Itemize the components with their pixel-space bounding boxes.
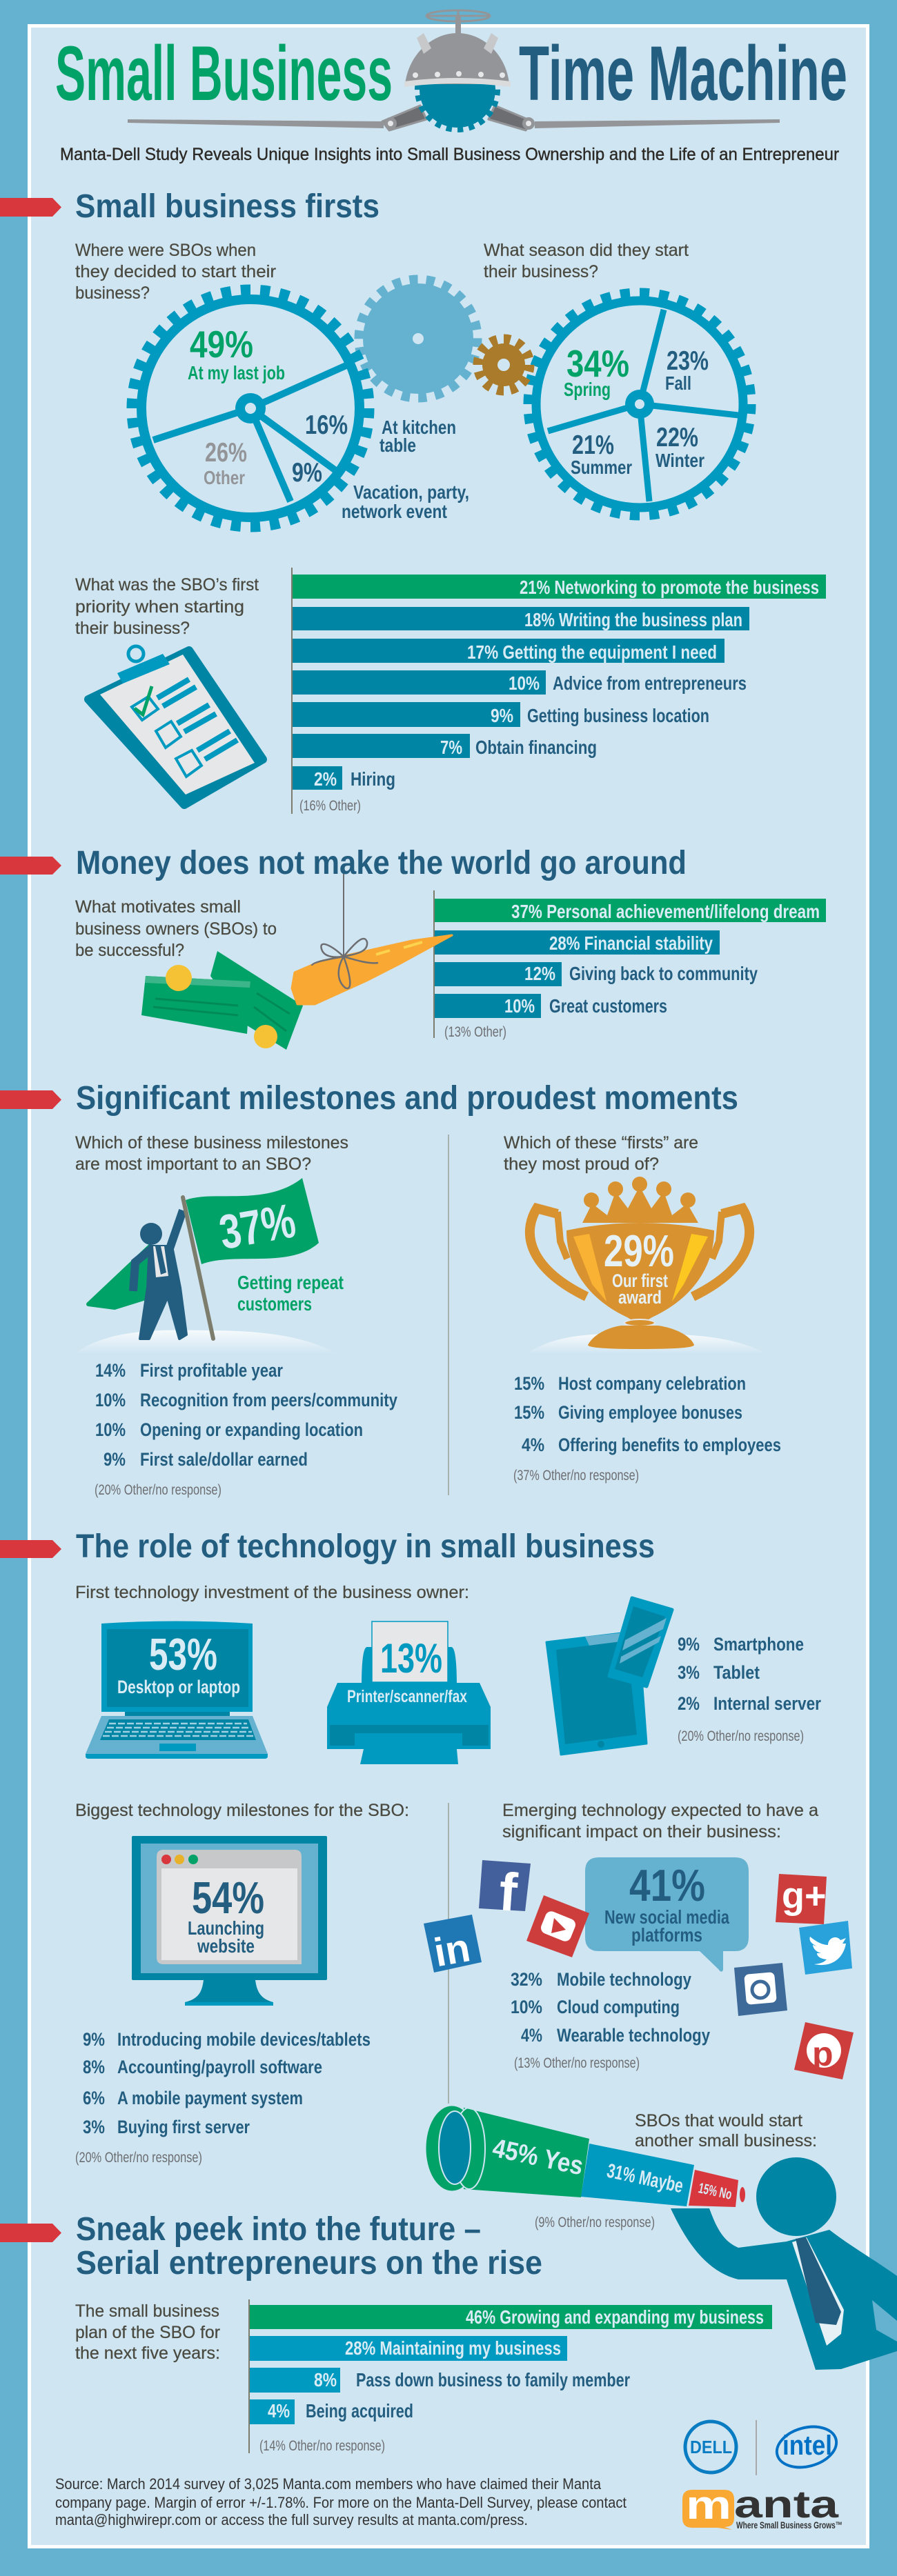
monitor value: 54%: 54% <box>192 1873 264 1923</box>
bar: 12% community <box>435 962 758 986</box>
list: other milestones: 10% <box>95 1390 126 1410</box>
note: 14% other: (14% Other/no response) <box>259 2438 385 2454</box>
bar: 18% writing plan <box>293 607 749 630</box>
list: other milestones: Recognition from peers/community <box>140 1390 397 1410</box>
callout: 41% new social media platforms: 41% <box>629 1860 705 1910</box>
callout: 41% new social media platforms: New social media <box>604 1906 729 1928</box>
question: Which of these business milestones <box>75 1133 348 1152</box>
icon: google plus: g+ <box>782 1875 827 1917</box>
label: 26% other: 26% <box>205 438 247 468</box>
bar chart: motivation <box>433 890 826 1040</box>
label: 21% summer: 21% <box>572 430 614 460</box>
note: 20% other: (20% Other/no response) <box>75 2150 202 2166</box>
question: five year plan <box>75 2302 220 2363</box>
bar: 8% pass down: Pass down business to family member <box>356 2369 630 2390</box>
bar: 37% personal achievement <box>435 899 826 922</box>
label: 22% winter: Winter <box>656 450 704 471</box>
trophy label: our first award: award <box>618 1287 662 1308</box>
bar: 10% customers: Great customers <box>549 995 667 1017</box>
bar: 46% growing: 46% Growing and expanding my business <box>466 2306 764 2328</box>
list: other firsts: Host company celebration <box>558 1373 746 1394</box>
icon: snow hill <box>75 1330 337 1354</box>
list: other firsts <box>514 1373 781 1455</box>
laptop value: 53%: 53% <box>149 1629 217 1679</box>
note: 13% other: (13% Other) <box>444 1024 506 1040</box>
question: first priority: What was the SBO’s first <box>75 575 259 595</box>
trophy value: 29%: 29% <box>604 1226 674 1276</box>
callout: 41% new social media platforms <box>585 1857 749 1972</box>
logo: intel: intel <box>782 2430 832 2461</box>
icon: carrot on a string <box>292 874 452 1004</box>
monitor label: launching website <box>188 1917 264 1957</box>
monitor label: launching website: website <box>197 1935 255 1957</box>
bar: 8% pass down: 8% <box>314 2369 337 2390</box>
list: emerging technology: Wearable technology <box>557 2025 710 2046</box>
icon: time machine <box>128 10 780 130</box>
question: motivates: business owners (SBOs) to <box>75 919 277 939</box>
bar: 28% financial stability: 28% Financial stability <box>549 932 713 954</box>
panel: proudest firsts <box>504 1133 781 1484</box>
list: technology milestones: Introducing mobile devices/tablets <box>117 2029 371 2050</box>
label: 9% vacation, party, network event: network event <box>342 501 447 522</box>
question: another small business: <box>635 2131 817 2150</box>
label: getting repeat customers: customers <box>237 1293 312 1315</box>
icon: tablet and phone <box>546 1598 672 1755</box>
heading: Small business firsts <box>75 188 379 225</box>
illustration: trophy <box>530 1177 749 1349</box>
bar: 28% maintaining: 28% Maintaining my business <box>345 2337 561 2359</box>
header: title and time machine <box>55 10 847 164</box>
list: technology milestones: 3% <box>83 2117 105 2137</box>
source note: company page. Margin of error +/-1.78%. For more on the Manta-Dell Survey, please contact <box>55 2494 627 2511</box>
logo: manta: Where Small Business Grows™ <box>736 2519 842 2530</box>
chart: gear pie, season <box>528 292 751 516</box>
trophy label: our first award <box>612 1270 668 1308</box>
question: where were SBOs: they decided to start their <box>75 262 276 281</box>
icon: middle gear <box>359 280 477 397</box>
question: they most proud of? <box>504 1155 659 1174</box>
label: 23% fall <box>665 346 709 394</box>
segment: 15% no: 15% No <box>697 2180 733 2203</box>
note: 20% other: (20% Other/no response) <box>95 1482 221 1498</box>
section: small business firsts <box>0 188 826 814</box>
list: emerging technology: 10% <box>511 1997 542 2017</box>
list: technology milestones: 6% <box>83 2088 105 2108</box>
list: other technology: 9% <box>678 1634 700 1655</box>
bar: 4% acquired <box>250 2399 413 2424</box>
section: money <box>0 845 826 1050</box>
question: where were SBOs: Where were SBOs when <box>75 241 256 260</box>
icon: facebook: f <box>497 1861 520 1923</box>
illustration: business hero with flag <box>88 1178 319 1339</box>
question: five year plan: plan of the SBO for <box>75 2323 220 2342</box>
list: other milestones: 10% <box>95 1419 126 1440</box>
heading: Significant milestones and proudest moments <box>76 1080 738 1117</box>
bar: 7% financing: Obtain financing <box>475 737 597 758</box>
label: 49% at my last job: At my last job <box>188 362 285 383</box>
list: emerging technology: Mobile technology <box>557 1969 691 1990</box>
icon: monitor <box>132 1836 327 2006</box>
source note: manta@highwirepr.com or access the full survey results at manta.com/press. <box>55 2511 528 2528</box>
label: 49% at my last job: 49% <box>190 323 253 366</box>
list: technology milestones: Buying first server <box>117 2117 250 2137</box>
question <box>635 2111 817 2150</box>
note: 13% other: (13% Other/no response) <box>514 2055 640 2071</box>
list: other milestones <box>95 1360 397 1470</box>
panel: biggest technology milestones <box>75 1801 409 2166</box>
subtitle: Manta-Dell Study Reveals Unique Insights into Small Business Ownership and the Life of an Entrepreneur <box>60 145 839 164</box>
bar: 2% hiring <box>293 766 395 790</box>
label: 22% winter: 22% <box>656 423 698 452</box>
section marker <box>0 857 61 875</box>
bar: 46% growing <box>250 2305 772 2329</box>
heading: Sneak peek into the future – <box>76 2211 481 2248</box>
list: technology milestones: Accounting/payroll software <box>117 2057 322 2077</box>
list: other technology: 3% <box>678 1662 700 1683</box>
list: other technology: Internal server <box>713 1693 821 1714</box>
question: Biggest technology milestones for the SBO: <box>75 1801 409 1820</box>
icon: linkedin: in <box>431 1925 473 1975</box>
list: emerging technology: 4% <box>521 2025 542 2046</box>
logo: dell: DELL <box>690 2437 732 2457</box>
list: other firsts: Giving employee bonuses <box>558 1402 742 1423</box>
bar: 7% financing <box>293 734 597 758</box>
label: 9% vacation, party, network event <box>292 458 469 522</box>
chart: gear pie, where SBOs were <box>132 290 469 527</box>
segment: 31% maybe: 31% Maybe <box>605 2160 685 2197</box>
segment: 45% yes: 45% Yes <box>490 2134 586 2181</box>
list: other milestones: 14% <box>95 1360 126 1381</box>
icon: youtube <box>526 1895 589 1957</box>
label: 23% fall: Fall <box>665 372 691 394</box>
question: first priority: their business? <box>75 619 190 638</box>
question: motivates: be successful? <box>75 941 184 960</box>
bar: 4% acquired: Being acquired <box>306 2400 413 2422</box>
flag value: 37%: 37% <box>215 1193 299 1259</box>
heading: Money does not make the world go around <box>76 845 687 881</box>
bar: 7% financing: 7% <box>440 737 462 758</box>
label: 23% fall: 23% <box>667 346 709 376</box>
icon: facebook <box>479 1860 531 1923</box>
illustration: telescope <box>426 2106 745 2207</box>
question: motivates <box>75 897 277 960</box>
bar: 21% networking: 21% Networking to promote the business <box>520 577 819 598</box>
source note <box>55 2475 627 2528</box>
question: five year plan: The small business <box>75 2302 219 2321</box>
heading: The role of technology in small business <box>76 1528 655 1565</box>
label: 16% at kitchen table: 16% <box>305 410 348 440</box>
panel: would start another business <box>426 2106 897 2370</box>
question: first priority: priority when starting <box>75 597 244 617</box>
question <box>504 1133 698 1174</box>
bar: 17% equipment: 17% Getting the equipment I need <box>467 641 717 663</box>
bar: 9% location: Getting business location <box>527 705 709 726</box>
question: Which of these “firsts” are <box>504 1133 698 1152</box>
heading <box>76 2211 542 2282</box>
question: motivates: What motivates small <box>75 897 241 917</box>
note: 20% other: (20% Other/no response) <box>678 1728 804 1744</box>
bar: 9% location <box>293 702 709 727</box>
logo: dell <box>685 2422 736 2473</box>
icon: clipboard <box>88 646 263 805</box>
icon: printer <box>327 1621 491 1764</box>
list: technology milestones <box>83 2029 371 2137</box>
icon: laptop <box>86 1621 268 1759</box>
source note: Source: March 2014 survey of 3,025 Manta.com members who have claimed their Manta <box>55 2475 602 2493</box>
icon: pinterest: p <box>812 2035 834 2073</box>
list: other milestones: Opening or expanding location <box>140 1419 363 1440</box>
logo: manta: m <box>686 2483 731 2528</box>
label: 9% vacation, party, network event: 9% <box>292 458 322 488</box>
list: technology milestones: A mobile payment system <box>117 2088 303 2108</box>
bar: 8% pass down <box>250 2368 630 2393</box>
label: getting repeat customers: Getting repeat <box>237 1272 344 1293</box>
section marker <box>0 1540 61 1558</box>
bar chart: first priority <box>291 568 826 814</box>
icon: instagram <box>734 1963 787 2016</box>
question: first priority <box>75 575 259 638</box>
callout: 41% new social media platforms: platforms <box>631 1924 702 1946</box>
panel: business milestones <box>75 1133 397 1498</box>
label: 21% summer <box>571 430 632 478</box>
question: first investment: First technology investment of the business owner: <box>75 1583 469 1602</box>
title: Small Business: Small Business <box>55 30 393 117</box>
list: other firsts: Offering benefits to employees <box>558 1435 781 1455</box>
label: 49% at my last job <box>188 323 285 383</box>
bar: 18% writing plan: 18% Writing the business plan <box>524 609 742 630</box>
list: other milestones: 9% <box>103 1449 126 1470</box>
icon: pinterest <box>794 2022 854 2079</box>
bar: 12% community: Giving back to community <box>569 963 758 984</box>
laptop label: Desktop or laptop <box>117 1677 240 1697</box>
list: technology milestones: 8% <box>83 2057 105 2077</box>
bar: 2% hiring: 2% <box>314 768 337 790</box>
icon: small brown gear <box>478 339 529 390</box>
list: other technology: Tablet <box>713 1662 760 1683</box>
label: 21% summer: Summer <box>571 457 632 478</box>
list: technology milestones: 9% <box>83 2029 105 2050</box>
question <box>502 1801 818 1841</box>
list: other technology: 2% <box>678 1693 700 1714</box>
list: emerging technology: Cloud computing <box>557 1997 680 2017</box>
question: where were SBOs: business? <box>75 283 150 303</box>
section: milestones <box>0 1080 781 1498</box>
trophy label: our first award: Our first <box>612 1270 668 1291</box>
printer value: 13%: 13% <box>380 1635 442 1681</box>
bar: 2% hiring: Hiring <box>351 768 395 790</box>
label: getting repeat customers <box>237 1272 344 1315</box>
list: emerging technology <box>511 1969 710 2046</box>
icon: money and coins <box>141 951 303 1050</box>
monitor label: launching website: Launching <box>188 1917 264 1939</box>
note: 37% other: (37% Other/no response) <box>513 1468 639 1484</box>
icon: linkedin <box>424 1915 482 1975</box>
question: are most important to an SBO? <box>75 1155 311 1174</box>
label: 9% vacation, party, network event: Vacation, party, <box>353 481 469 503</box>
section marker <box>0 1090 61 1109</box>
illustration: person <box>671 2157 897 2370</box>
section marker <box>0 198 61 217</box>
question: what season <box>484 241 689 281</box>
icon: snow hill <box>526 1334 767 1354</box>
label: 16% at kitchen table: table <box>379 435 416 456</box>
logo: manta <box>682 2482 842 2530</box>
list: other firsts: 15% <box>514 1402 544 1423</box>
bar: 10% advice: Advice from entrepreneurs <box>553 672 747 694</box>
question: Emerging technology expected to have a <box>502 1801 818 1820</box>
section: sneak peek <box>0 2211 772 2454</box>
bar: 12% community: 12% <box>524 963 555 984</box>
section: technology <box>0 1528 854 2166</box>
list: other firsts: 4% <box>522 1435 544 1455</box>
bar: 10% advice <box>293 670 747 695</box>
list: other technology: Smartphone <box>713 1634 804 1655</box>
section marker <box>0 2224 61 2242</box>
bar: 10% customers <box>435 994 667 1018</box>
bar: 10% customers: 10% <box>504 995 535 1017</box>
bar chart: five year plan <box>248 2299 772 2454</box>
list: other milestones: First profitable year <box>140 1360 283 1381</box>
bar: 28% financial stability <box>435 930 720 955</box>
label: 34% spring <box>564 342 629 400</box>
note: 16% other: (16% Other) <box>299 798 361 814</box>
list: other milestones: First sale/dollar earned <box>140 1449 308 1470</box>
question: what season: What season did they start <box>484 241 689 260</box>
bar: 10% advice: 10% <box>509 672 540 694</box>
label: 16% at kitchen table: At kitchen <box>382 417 456 438</box>
icon: twitter <box>799 1921 852 1975</box>
question: significant impact on their business: <box>502 1822 781 1841</box>
list: emerging technology: 32% <box>511 1969 542 1990</box>
question: SBOs that would start <box>635 2111 802 2130</box>
logo: intel <box>772 2421 841 2473</box>
question <box>75 1133 348 1174</box>
question: where were SBOs <box>75 241 276 303</box>
label: 34% spring: Spring <box>564 379 611 400</box>
printer label: Printer/scanner/fax <box>347 1687 467 1706</box>
question: what season: their business? <box>484 262 598 281</box>
label: 22% winter <box>656 423 704 471</box>
bar: 4% acquired: 4% <box>268 2400 290 2422</box>
label: 26% other: Other <box>204 467 245 488</box>
bar: 17% equipment <box>293 639 724 663</box>
logo: manta: anta <box>734 2482 839 2526</box>
label: 26% other <box>204 438 247 488</box>
bar: 37% personal achievement: 37% Personal achievement/lifelong dream <box>511 901 820 922</box>
heading: Serial entrepreneurs on the rise <box>76 2245 542 2282</box>
question: five year plan: the next five years: <box>75 2344 220 2363</box>
panel: emerging technology <box>424 1801 854 2079</box>
bar: 21% networking <box>293 575 826 599</box>
label: 16% at kitchen table <box>305 410 456 456</box>
label: 34% spring: 34% <box>566 342 629 385</box>
bar: 28% maintaining <box>250 2336 567 2361</box>
list: other technology <box>678 1634 821 1714</box>
bar: 9% location: 9% <box>491 705 513 726</box>
note: 9% other: (9% Other/no response) <box>535 2215 655 2230</box>
list: other firsts: 15% <box>514 1373 544 1394</box>
